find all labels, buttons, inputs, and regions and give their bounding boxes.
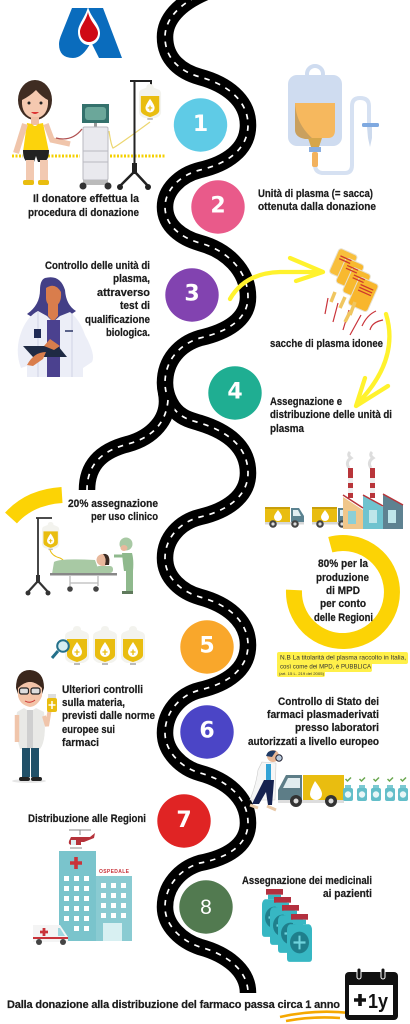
arrow: step 3 to suitable bags [230,258,323,299]
illustration: medicine bottles [262,889,312,962]
illustration: suitable plasma bags [320,248,386,335]
text: step 2 caption: ottenuta dalla donazione [258,201,376,213]
step 1: donor at donation machine [12,80,165,190]
road: branch toward clinical use [87,392,168,490]
underline scribble [280,1012,350,1021]
number 3: 3 [184,282,200,306]
note: public ownership of plasma: (art. 15 L. 219 del 2005) [279,672,324,676]
logo [59,7,122,58]
text: step 6 caption: farmaci plasmaderivati [267,709,379,721]
text: 20 percent caption: per uso clinico [91,511,158,523]
number 5 [180,620,234,674]
number 8 [179,880,233,934]
text: step 1 caption: procedura di donazione [28,207,139,219]
illustration: factory [343,452,403,529]
illustration: lab doctor [18,277,93,377]
nurse [114,538,133,594]
number 4 [208,366,262,420]
number 6: 6 [199,718,215,744]
number 1: 1 [193,112,208,137]
text: step 1 caption [28,193,140,219]
number 3 [165,268,219,322]
text: 80 percent caption: 80% per la [318,558,369,570]
text: step 6 caption: Controllo di Stato dei [278,696,379,708]
text: step 4 caption: plasma [270,423,305,435]
tubes [56,129,82,139]
illustration: bags under magnifier [52,626,145,665]
text: step 1 caption: Il donatore effettua la [33,193,140,205]
truck [278,775,344,807]
text: 80 percent caption: delle Regioni [314,612,373,624]
text: 80 percent caption [314,558,373,624]
number 8: 8 [200,896,212,919]
text: step 3 caption: plasma, [113,273,150,285]
text: step 3 caption: Controllo delle unità di [45,260,150,272]
illustration: transfusion patient [26,518,133,596]
illustration: hospital, helicopter and ambulance [33,830,132,945]
text: 80 percent caption: per conto [320,598,366,610]
number 7 [157,794,211,848]
text: step 3 caption [45,260,150,339]
number 2: 2 [210,194,226,218]
text: step 6 caption: presso laboratori [295,722,379,734]
illustration: plasma bag [288,66,379,173]
text: step 5 caption: Ulteriori controlli [62,684,143,696]
trucks [265,507,351,528]
note: public ownership of plasma: così come dei MPD, è PUBBLICA [280,664,372,670]
text: 80 percent caption: di MPD [326,585,360,597]
note: public ownership of plasma [277,652,408,677]
text: step 5 caption: europee sui [62,724,115,736]
text: step 6 caption: autorizzati a livello europeo [248,736,379,748]
text: step 4 caption: distribuzione delle unità di [270,409,392,421]
text: step 5 caption: previsti dalle norme [62,710,155,722]
inspector [250,750,282,810]
road: main route from top to bottom [165,0,248,993]
number 5: 5 [199,634,215,658]
number 4: 4 [227,380,243,404]
text: step 8 caption [242,875,372,900]
helicopter [69,830,95,848]
text: 20 percent caption [68,498,158,523]
text: conclusion: Dalla donazione alla distribuzione del farmaco passa circa 1 anno [7,999,340,1011]
illustration: inspector, truck and checked bottles [250,750,408,810]
arrow: suitable bags to step 4 [356,314,389,406]
text: step 5 caption: farmaci [62,737,99,749]
text: suitable bags caption: sacche di plasma idonee [270,338,383,350]
number 1 [174,98,227,152]
text: step 8 caption: ai pazienti [323,888,372,900]
text: step 3 caption: test di [120,300,150,312]
text: step 8 caption: Assegnazione dei medicinali [242,875,372,887]
text: step 3 caption: attraverso [97,287,150,299]
IV stand [117,81,161,190]
illustration: hospital, helicopter and ambulance: OSPEDALE [99,869,130,875]
text: step 3 caption: biologica. [106,327,150,339]
text: step 5 caption [62,684,155,749]
donation machine [80,104,112,190]
text: step 6 caption [248,696,379,748]
ring: 80 percent [294,543,392,641]
note: public ownership of plasma: N.B La titolarità del plasma raccolto in Italia, [280,654,406,662]
text: step 2 caption: Unità di plasma (= sacca) [258,188,373,200]
icon: calendar plus one year: 1y [368,991,389,1013]
number 6 [180,705,234,759]
ring: 20 percent [11,495,62,518]
icon: calendar plus one year [345,968,398,1020]
number 7: 7 [176,808,192,833]
text: 80 percent caption: produzione [316,572,369,584]
text: step 3 caption: qualificazione [85,314,150,326]
donor [16,80,70,185]
text: step 4 caption [270,396,392,435]
number 2 [191,180,245,234]
checked bottles [343,778,408,801]
text: step 2 caption [258,188,376,213]
text: step 5 caption: sulla materia, [62,697,125,709]
text: step 7 caption: Distribuzione alle Regioni [28,813,146,825]
text: step 4 caption: Assegnazione e [270,396,342,408]
text: 20 percent caption: 20% assegnazione [68,498,158,510]
illustration: pharmacist with glasses [12,670,57,783]
ambulance [33,925,68,945]
